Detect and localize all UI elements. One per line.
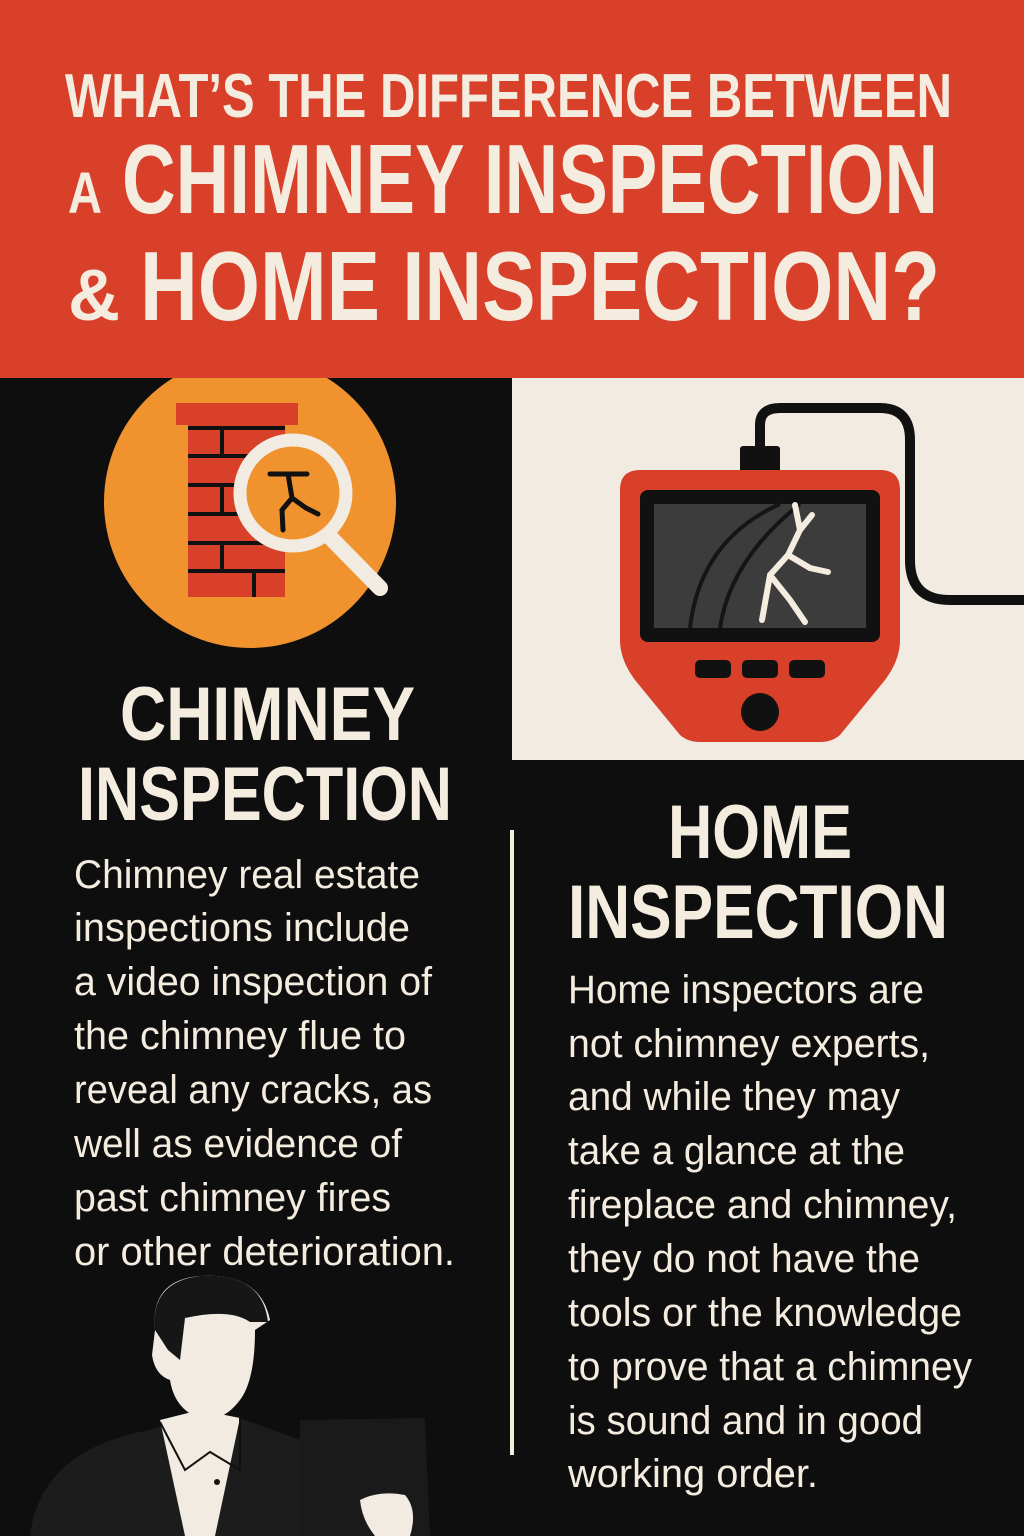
text block: chimney inspection description: or other deterioration. xyxy=(74,1230,455,1274)
text block: home inspection description: to prove that a chimney xyxy=(568,1345,972,1389)
text block: home inspection description: and while they may xyxy=(568,1075,900,1119)
heading: home inspection: INSPECTION xyxy=(568,870,948,955)
panel: home inspection image background xyxy=(512,378,1024,760)
text block: chimney inspection description: well as evidence of xyxy=(73,1122,403,1166)
text block: chimney inspection description xyxy=(73,853,455,1274)
heading: chimney inspection: INSPECTION xyxy=(78,752,452,837)
heading: home inspection xyxy=(568,790,948,955)
text block: chimney inspection description: past chimney fires xyxy=(74,1176,391,1220)
text block: home inspection description: take a glance at the xyxy=(568,1129,905,1173)
divider line xyxy=(510,830,514,1455)
icon: inspector person xyxy=(30,1276,430,1536)
text block: chimney inspection description: the chimney flue to xyxy=(74,1014,406,1058)
title banner xyxy=(0,0,1024,378)
heading: home inspection: HOME xyxy=(668,790,852,875)
text block: chimney inspection description: Chimney real estate xyxy=(74,853,420,897)
text block: home inspection description: is sound and in good xyxy=(568,1399,923,1443)
text block: chimney inspection description: a video inspection of xyxy=(74,960,433,1004)
heading: chimney inspection xyxy=(78,672,452,837)
text block: home inspection description: Home inspectors are xyxy=(568,968,924,1012)
icon: video inspection camera xyxy=(620,408,1024,742)
text block: home inspection description: tools or the knowledge xyxy=(568,1291,962,1335)
text block: home inspection description xyxy=(567,968,972,1496)
title banner: & xyxy=(68,256,120,336)
text block: home inspection description: fireplace and chimney, xyxy=(568,1183,957,1227)
text block: home inspection description: not chimney experts, xyxy=(568,1022,930,1066)
text block: home inspection description: working order. xyxy=(567,1452,818,1496)
icon: chimney with magnifier xyxy=(104,356,396,648)
text block: home inspection description: they do not have the xyxy=(568,1237,920,1281)
text block: chimney inspection description: inspections include xyxy=(74,906,410,950)
text block: chimney inspection description: reveal any cracks, as xyxy=(74,1068,432,1112)
title banner: A xyxy=(68,161,102,226)
heading: chimney inspection: CHIMNEY xyxy=(120,672,415,757)
